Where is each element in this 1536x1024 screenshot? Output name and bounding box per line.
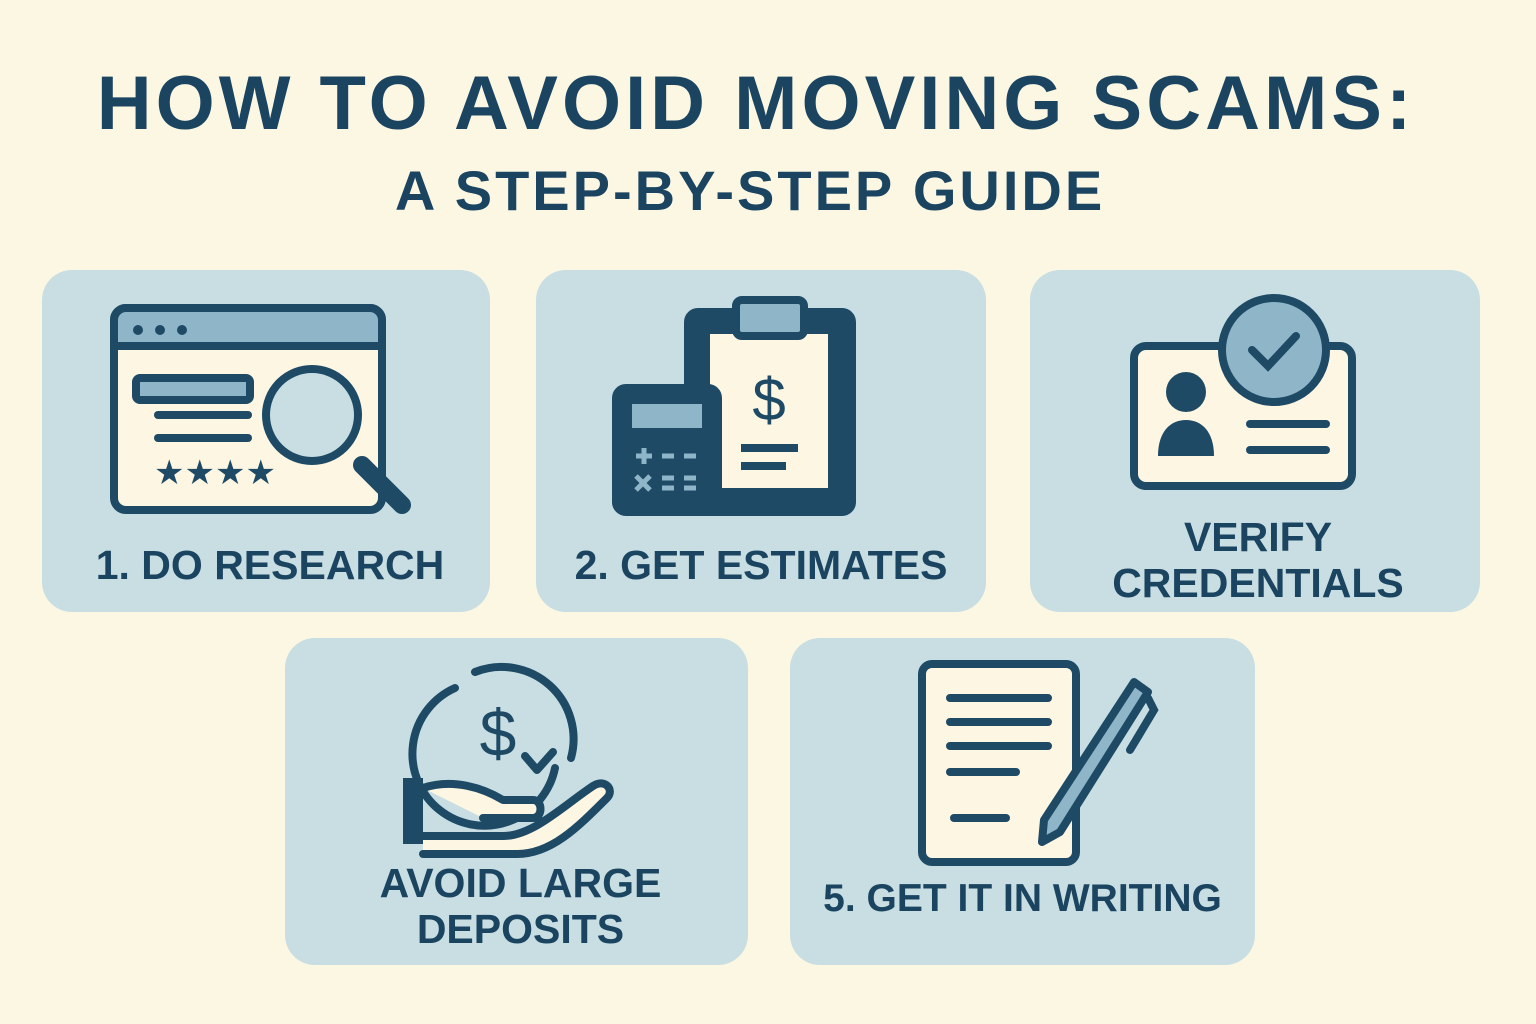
label: 1. DO RESEARCH [96,542,444,588]
panel: avoid large deposits [285,638,748,965]
panel: get it in writing [790,638,1255,965]
label: VERIFY [1184,514,1332,560]
title: HOW TO AVOID MOVING SCAMS: [97,61,1415,146]
label: AVOID LARGE [380,860,661,906]
subtitle: A STEP-BY-STEP GUIDE [395,159,1105,222]
label: 5. GET IT IN WRITING [823,877,1222,920]
icon: browser with magnifier [110,304,411,514]
icon: id card with check [1130,294,1356,490]
icon: browser with magnifier: ★★★★ [154,454,276,492]
icon: clipboard and calculator [612,296,856,516]
panel: get estimates [536,270,986,612]
icon: document and pen [918,660,1158,866]
label [380,860,661,952]
panel: verify credentials [1030,270,1480,612]
panel: do research [42,270,490,612]
icon: hand with coin [403,662,614,858]
icon: hand with coin: $ [480,696,516,770]
icon: clipboard and calculator: $ [752,366,786,433]
label [1112,514,1404,606]
label: DEPOSITS [417,906,624,952]
label: 2. GET ESTIMATES [575,542,947,588]
label: CREDENTIALS [1112,560,1404,606]
